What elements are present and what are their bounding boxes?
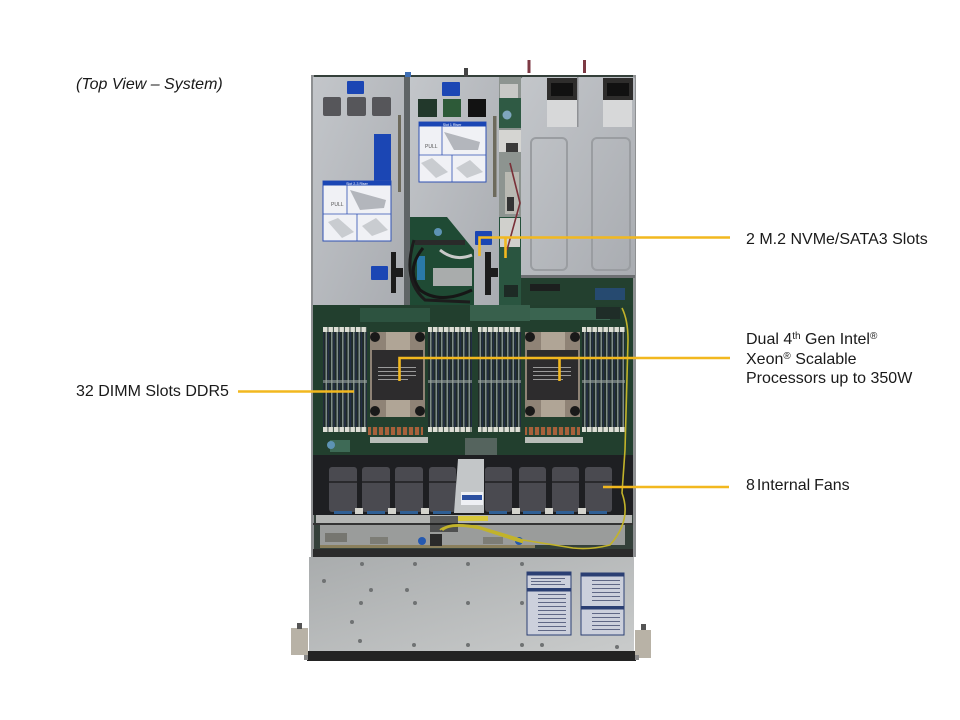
label: DIMM slots: 32 DIMM Slots DDR5 — [76, 383, 229, 400]
yellow cable — [440, 308, 628, 549]
fan 3 — [395, 467, 423, 514]
DIMM bank 2 — [428, 327, 472, 432]
label: processors: Processors up to 350W — [746, 370, 912, 387]
label: processors: Xeon® Scalable — [746, 350, 857, 368]
blue latch icon — [475, 231, 492, 245]
CPU 1 heatsink — [370, 332, 425, 417]
rear I/O bay — [313, 515, 633, 557]
power supply vents — [547, 78, 633, 100]
fan 8 — [585, 467, 612, 514]
CPU 2 heatsink — [525, 332, 580, 417]
fan 5 — [485, 467, 512, 514]
view caption: (Top View – System) — [76, 76, 223, 93]
fan 4 — [429, 467, 456, 514]
slot 2-3 riser instruction label: Slot 2-3 Riser — [346, 182, 369, 186]
front bezel lip — [307, 651, 636, 661]
fan 2 — [362, 467, 390, 514]
label: processors: Dual 4th Gen Intel® — [746, 331, 877, 348]
service label right — [581, 573, 624, 635]
slot 1 riser instruction label — [419, 122, 486, 182]
leader line: fans — [603, 486, 729, 488]
leader line: DIMM slots — [238, 390, 354, 393]
DIMM slot banks — [323, 327, 625, 432]
slot 2-3 riser instruction label: PULL — [331, 202, 344, 208]
blue latch icon — [371, 266, 388, 280]
slot 2-3 riser instruction label — [323, 181, 391, 241]
cover screws — [322, 562, 619, 649]
red cable — [507, 163, 520, 250]
service label left — [527, 572, 571, 635]
slot 1 riser instruction label: Slot 1 Riser — [443, 123, 462, 127]
riser cut-out with cables — [410, 215, 474, 305]
label: M.2 slots: 2 M.2 NVMe/SATA3 Slots — [746, 231, 928, 248]
left riser cover — [313, 77, 404, 305]
left riser vent windows — [323, 97, 391, 116]
label: fans: 8 Internal Fans — [746, 477, 850, 494]
vertical slot label — [374, 134, 391, 181]
middle riser cover — [410, 77, 499, 305]
fan 1 — [329, 467, 357, 514]
leader line: M.2 slots — [480, 238, 730, 258]
blue pull icon — [442, 82, 460, 96]
DIMM bank 3 — [478, 327, 521, 432]
black riser latch — [391, 252, 403, 293]
leader line: processors — [400, 358, 730, 381]
chassis base — [311, 75, 636, 557]
slot 1 riser instruction label: PULL — [425, 144, 438, 150]
motherboard — [313, 305, 633, 455]
fan row — [313, 455, 633, 515]
middle riser windows — [418, 99, 486, 117]
fan 7 — [552, 467, 579, 514]
power supply cover — [521, 77, 635, 278]
fan 6 — [519, 467, 546, 514]
black riser latch — [485, 252, 498, 295]
rear handle posts — [405, 60, 586, 77]
label: processors — [746, 331, 912, 387]
blue pull icon — [347, 81, 364, 94]
DIMM bank 4 — [582, 327, 625, 432]
right rack ear — [635, 624, 651, 660]
centre air shroud bracket — [454, 459, 484, 513]
left rack ear — [291, 623, 308, 660]
front top cover — [309, 557, 634, 651]
DIMM bank 1 — [323, 327, 367, 432]
